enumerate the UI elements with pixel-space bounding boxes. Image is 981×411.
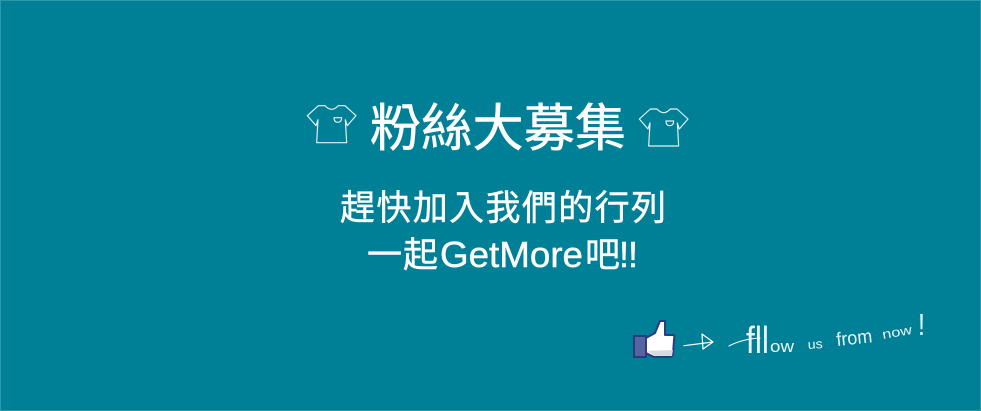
icon: left t-shirt [307,106,356,143]
一起: 一起 [367,236,438,275]
word: fll: fll [746,320,769,362]
word: us: us [807,336,824,352]
handwritten note [729,307,925,362]
arrow [684,334,713,349]
word: from: from [835,326,873,351]
icon: thumbs up [634,321,674,357]
word: now: now [881,322,914,342]
exclamation marks: ! [628,234,638,275]
word: ow: ow [770,337,795,356]
GetMore: GetMore [440,234,583,275]
flourish stroke on f [729,338,760,346]
exclamation mark: ! [918,307,925,342]
exclamation marks: ! [619,234,629,275]
subtitle line two [367,234,638,275]
subtitle line one: 趕快加入我們的行列 [340,189,666,228]
icon: right t-shirt [639,109,688,146]
吧: 吧 [585,236,620,275]
title: 粉絲大募集 [370,100,626,157]
